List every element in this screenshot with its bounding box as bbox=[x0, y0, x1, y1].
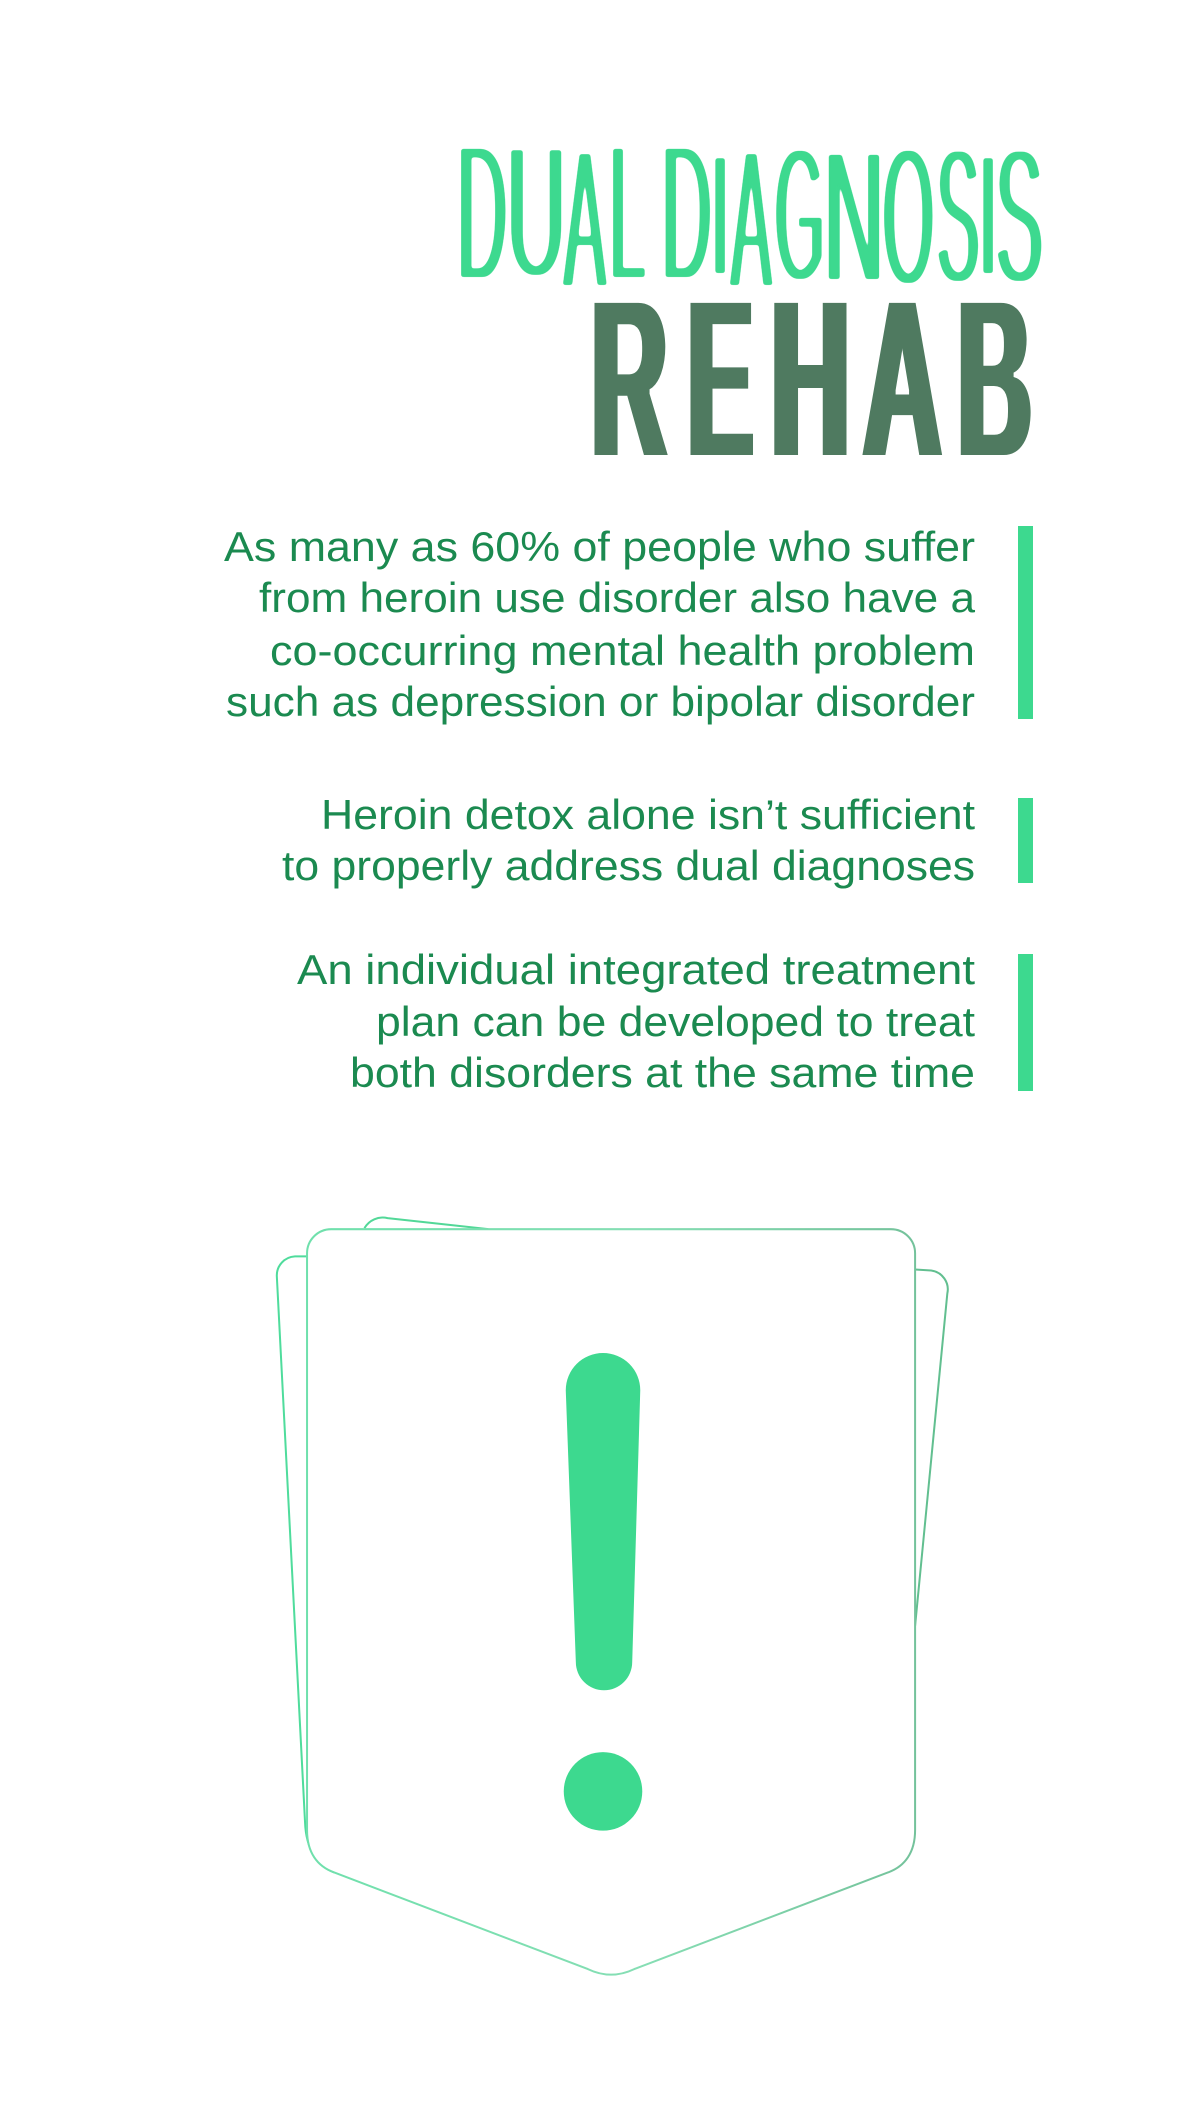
exclamation mark bbox=[564, 1353, 642, 1831]
text block: integrated treatment: An individual integrated treatment bbox=[297, 946, 975, 993]
text block: integrated treatment bbox=[297, 946, 975, 1096]
title line: Dual Diagnosis: O bbox=[883, 107, 934, 326]
exclamation dot bbox=[564, 1752, 642, 1831]
text block: dual diagnosis prevalence: co-occurring mental health problem bbox=[270, 627, 975, 674]
text block: dual diagnosis prevalence: As many as 60% of people who suffer bbox=[224, 523, 975, 570]
title line: Dual Diagnosis: S bbox=[996, 111, 1043, 323]
title bbox=[458, 104, 1043, 506]
exclamation stem bbox=[566, 1353, 640, 1690]
title line: Dual Diagnosis bbox=[458, 104, 1043, 331]
title line: Rehab: H bbox=[771, 252, 850, 505]
text block: detox alone: Heroin detox alone isn’t sufficient bbox=[321, 791, 975, 838]
back card top bbox=[364, 1218, 488, 1229]
title line: Dual Diagnosis: D bbox=[458, 104, 507, 321]
title line: Dual Diagnosis: G bbox=[775, 108, 824, 320]
text block: detox alone: to properly address dual diagnoses bbox=[282, 842, 975, 889]
title line: Dual Diagnosis: D bbox=[662, 104, 711, 321]
back card right bbox=[915, 1269, 948, 1626]
text block: dual diagnosis prevalence bbox=[224, 523, 976, 725]
title line: Dual Diagnosis: L bbox=[610, 104, 645, 322]
icon: warning note stack bbox=[277, 1218, 948, 1975]
title line: Rehab: R bbox=[592, 253, 667, 506]
title line: Dual Diagnosis: U bbox=[507, 106, 565, 316]
title line: Dual Diagnosis: A bbox=[731, 109, 771, 331]
title line: Dual Diagnosis: S bbox=[937, 110, 979, 324]
accent bar 2 bbox=[1018, 798, 1033, 883]
title line: Dual Diagnosis: A bbox=[564, 110, 606, 331]
text block: integrated treatment: both disorders at the same time bbox=[350, 1049, 975, 1096]
title line: Dual Diagnosis: I bbox=[980, 118, 996, 314]
title line: Dual Diagnosis: N bbox=[824, 111, 884, 322]
front card bbox=[307, 1229, 915, 1975]
text block: dual diagnosis prevalence: such as depression or bipolar disorder bbox=[226, 678, 975, 725]
text block: detox alone bbox=[282, 791, 975, 889]
title line: Rehab bbox=[592, 252, 1031, 506]
title line: Rehab: B bbox=[958, 253, 1031, 506]
text block: integrated treatment: plan can be developed to treat bbox=[376, 998, 975, 1045]
title line: Dual Diagnosis: I bbox=[712, 118, 728, 314]
accent bar 3 bbox=[1018, 954, 1033, 1091]
title line: Rehab: E bbox=[688, 252, 753, 505]
back card left bbox=[277, 1256, 334, 1872]
title line: Rehab: A bbox=[863, 252, 942, 505]
accent bar 1 bbox=[1018, 526, 1033, 719]
text block: dual diagnosis prevalence: from heroin use disorder also have a bbox=[259, 574, 976, 621]
